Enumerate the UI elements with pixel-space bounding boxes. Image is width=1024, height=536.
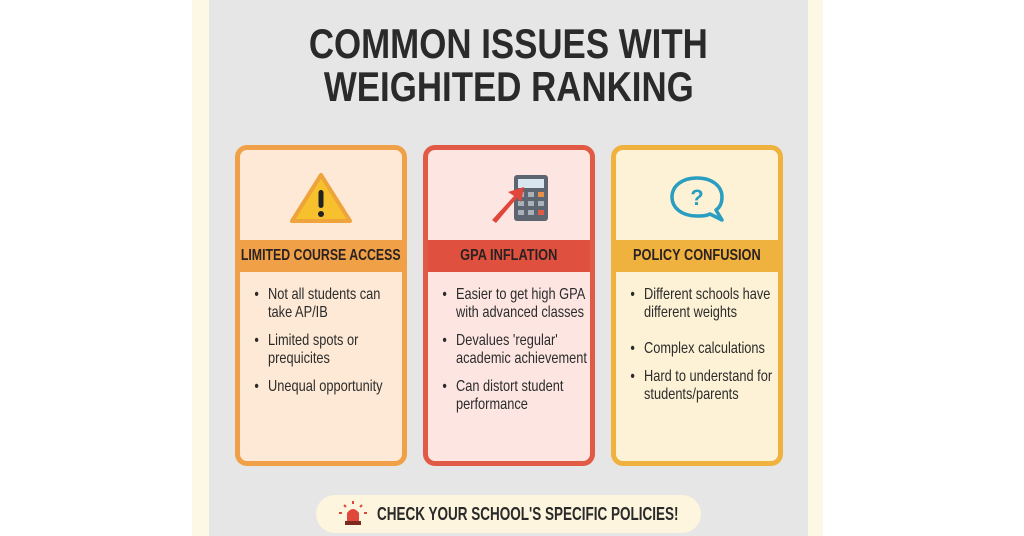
heading: POLICY CONFUSION xyxy=(633,247,761,264)
title xyxy=(309,20,708,110)
icon: siren xyxy=(339,501,367,525)
heading: LIMITED COURSE ACCESS xyxy=(241,247,401,264)
text block: Unequal opportunity xyxy=(268,378,383,395)
heading xyxy=(240,240,402,272)
callout xyxy=(316,495,701,533)
text block: Limited spots or prequicites xyxy=(268,332,358,367)
icon: question speech bubble: ? xyxy=(690,185,704,210)
text block xyxy=(254,286,383,395)
title: COMMON ISSUES WITH xyxy=(309,20,708,67)
text block: Complex calculations xyxy=(644,340,765,357)
background panel xyxy=(209,0,808,536)
text block: Not all students can take AP/IB xyxy=(268,286,380,321)
panel: limited course access xyxy=(235,145,407,466)
icon: calculator with arrow xyxy=(492,175,548,223)
text block xyxy=(442,286,587,413)
title: WEIGHITED RANKING xyxy=(324,63,693,110)
text block: Can distort student performance xyxy=(456,378,563,413)
text block: Devalues 'regular' academic achievement xyxy=(456,332,587,367)
text block xyxy=(630,286,772,403)
text block: Hard to understand for students/parents xyxy=(644,368,772,403)
heading xyxy=(428,240,590,272)
icon: warning triangle xyxy=(290,172,352,223)
text block: Easier to get high GPA with advanced classes xyxy=(456,286,585,321)
text block: Different schools have different weights xyxy=(644,286,770,321)
heading xyxy=(616,240,778,272)
callout: CHECK YOUR SCHOOL'S SPECIFIC POLICIES! xyxy=(377,504,678,524)
heading: GPA INFLATION xyxy=(460,247,558,264)
panel: policy confusion xyxy=(611,145,783,466)
icon: question speech bubble xyxy=(670,176,724,222)
panel: gpa inflation xyxy=(423,145,595,466)
